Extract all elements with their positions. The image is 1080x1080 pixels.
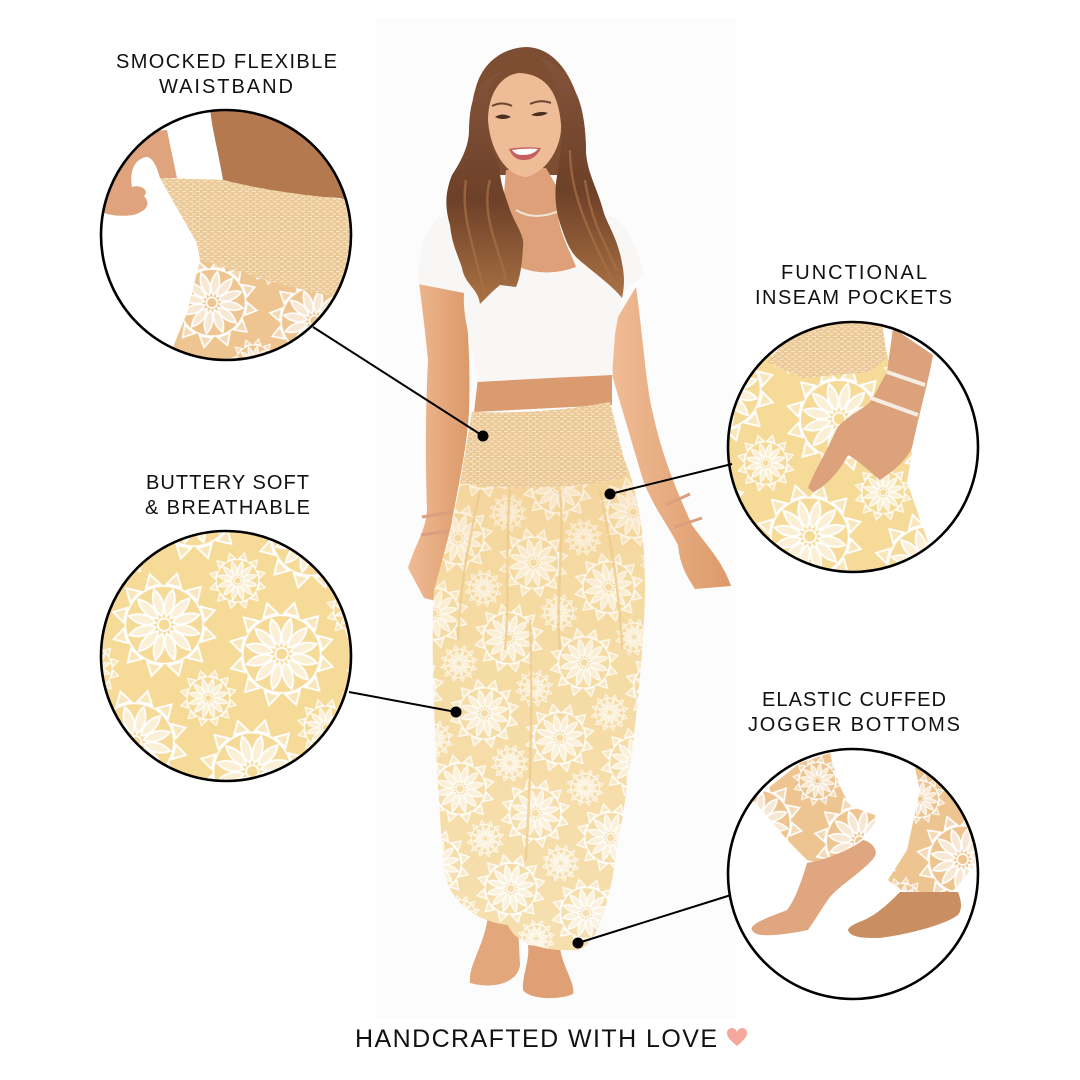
hair crown <box>470 47 586 175</box>
label: functional inseam pockets: FUNCTIONAL <box>781 262 927 284</box>
cuff left <box>753 753 875 863</box>
smocking <box>160 178 352 302</box>
circle outlines <box>101 110 978 999</box>
circle: inseam pocket detail <box>729 323 933 571</box>
foot left <box>470 915 520 986</box>
necklace <box>516 210 561 216</box>
foot right <box>523 945 573 998</box>
hand <box>100 130 177 216</box>
label: functional inseam pockets: INSEAM POCKETS <box>755 287 952 309</box>
label: elastic cuffed jogger bottoms <box>748 689 960 736</box>
crop top <box>418 215 644 382</box>
pants <box>433 402 645 950</box>
circle: fabric detail <box>100 530 352 782</box>
foot right <box>848 892 961 938</box>
label: smocked flexible waistband: WAISTBAND <box>159 76 293 98</box>
forearm and hand <box>808 328 933 492</box>
bracelets <box>871 372 925 415</box>
neck and chest <box>503 168 576 272</box>
pants tone overlay <box>433 402 645 950</box>
hair strands <box>465 150 617 292</box>
midriff <box>474 372 612 412</box>
face <box>488 73 561 177</box>
pants body <box>433 402 645 950</box>
bracelets <box>421 494 702 535</box>
icon: heart <box>727 1028 747 1046</box>
smocked waistband <box>460 402 628 488</box>
label: functional inseam pockets <box>755 262 952 309</box>
label: elastic cuffed jogger bottoms: JOGGER BOTTOMS <box>748 714 960 736</box>
smocking <box>767 322 887 378</box>
label: smocked flexible waistband <box>116 51 337 98</box>
foot left <box>752 840 876 935</box>
arm right <box>612 287 731 589</box>
label: buttery soft and breathable <box>145 472 310 519</box>
label: buttery soft and breathable: & BREATHABLE <box>145 497 310 519</box>
fabric <box>160 178 352 362</box>
label: buttery soft and breathable: BUTTERY SOFT <box>146 472 309 494</box>
footer tagline: HANDCRAFTED WITH LOVE <box>355 1025 717 1053</box>
hair left lock <box>446 72 523 304</box>
circle: waistband detail <box>100 108 352 362</box>
hair right lock <box>540 58 624 298</box>
arm left <box>408 283 469 603</box>
photo backdrop panel <box>376 18 736 1018</box>
leader lines and dots <box>313 327 732 948</box>
label: elastic cuffed jogger bottoms: ELASTIC CUFFED <box>762 689 946 711</box>
cuff right <box>888 768 980 895</box>
fabric folds <box>458 490 622 860</box>
circle: jogger cuff detail <box>752 753 976 938</box>
model figure <box>408 47 731 998</box>
torso skin <box>210 111 344 200</box>
facial features <box>492 101 551 160</box>
fabric <box>729 346 928 571</box>
label: smocked flexible waistband: SMOCKED FLEXIBLE <box>116 51 337 73</box>
